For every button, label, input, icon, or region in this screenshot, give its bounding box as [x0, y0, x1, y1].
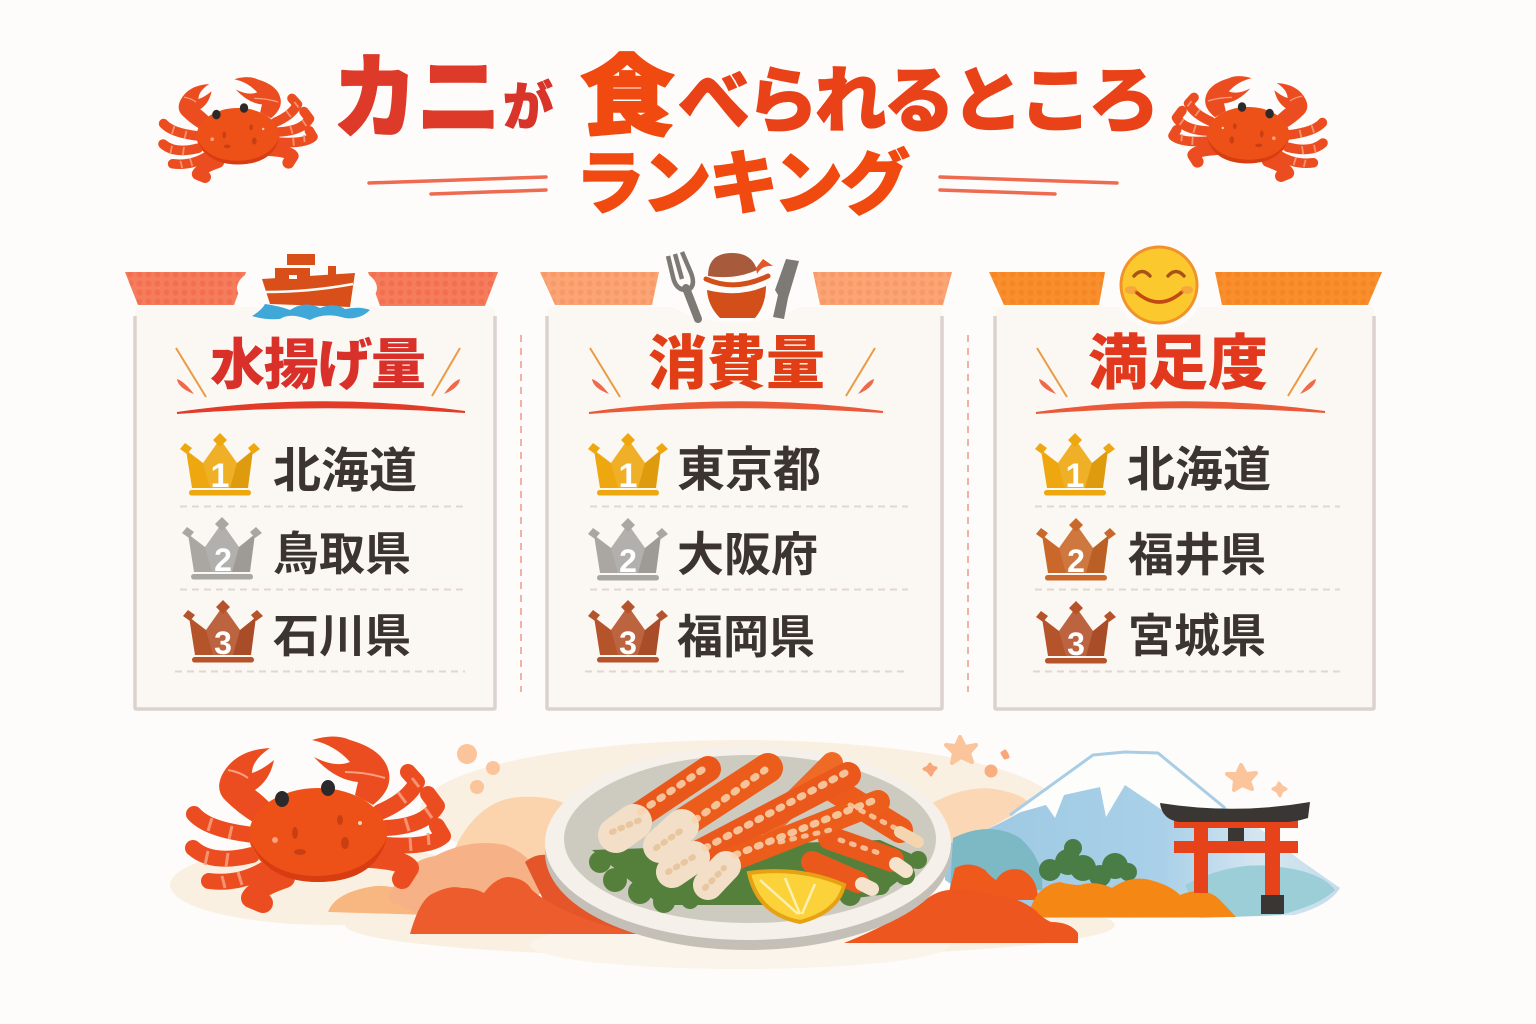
rank 2	[182, 517, 411, 580]
heading underline	[1036, 402, 1325, 413]
small crab legs	[770, 763, 918, 889]
rank 3	[183, 600, 411, 662]
ribbon	[125, 272, 498, 306]
rank 3: 福岡県	[677, 611, 815, 663]
orange bushes	[947, 864, 1038, 900]
icon: crab right	[1173, 76, 1323, 176]
panel: landing volume	[125, 254, 498, 710]
panel: consumption	[540, 250, 952, 710]
heading underline	[589, 402, 883, 413]
ranking rows	[1035, 433, 1271, 664]
title heading: カニ	[333, 48, 501, 150]
heading sparkles	[1037, 348, 1317, 397]
pine tree	[1039, 839, 1137, 887]
rank 3: 宮城県	[1128, 610, 1266, 662]
torii gate	[1160, 802, 1310, 914]
rank 3: 3	[619, 625, 637, 661]
peach hill right	[910, 788, 1030, 850]
orange bushes front	[1028, 879, 1236, 917]
plate of crab legs	[545, 746, 951, 950]
card	[135, 307, 495, 710]
rank 2	[1036, 518, 1266, 581]
title heading: が	[503, 78, 553, 137]
rank 1: 北海道	[273, 445, 417, 498]
rank 1	[1035, 433, 1271, 497]
icon: large crab	[193, 736, 443, 903]
rank 2: 2	[214, 542, 232, 578]
heading: 満足度	[1088, 330, 1268, 397]
panel: satisfaction	[989, 240, 1382, 710]
ribbon	[540, 272, 952, 305]
icon: crab left	[163, 77, 313, 177]
ribbon	[989, 272, 1382, 305]
rank 2: 鳥取県	[273, 528, 411, 580]
heading underline	[177, 402, 465, 413]
rank 2	[588, 518, 818, 581]
heading: 消費量	[648, 331, 825, 397]
icon: cutlery and bowl	[668, 252, 799, 319]
title heading	[333, 48, 1160, 223]
title heading: べられるところ	[678, 62, 1160, 142]
heading sparkles	[176, 348, 460, 397]
heading: 水揚げ量	[210, 334, 426, 396]
rank 1	[180, 433, 417, 498]
rank 2: 福井県	[1128, 529, 1266, 581]
title heading: ランキング	[575, 145, 910, 223]
title heading: 食	[580, 48, 675, 147]
rank 3: 3	[214, 625, 232, 661]
plate	[545, 756, 951, 950]
rank 2: 2	[619, 543, 637, 579]
card	[547, 307, 942, 710]
rank 1: 1	[211, 457, 229, 495]
cream wash background	[170, 740, 1115, 969]
icon: ship	[252, 254, 370, 320]
large crab legs	[612, 768, 895, 888]
icon: smiley	[1114, 240, 1204, 330]
rank 1	[588, 433, 821, 497]
lettuce	[589, 840, 927, 913]
heading sparkles	[590, 348, 875, 397]
ranking rows	[588, 433, 821, 663]
white notch behind ship	[237, 260, 377, 316]
rank 2: 2	[1067, 543, 1085, 579]
rank 1: 1	[619, 457, 637, 495]
rank 2: 大阪府	[677, 528, 818, 581]
white notch behind bowl	[658, 250, 814, 322]
rank 1: 北海道	[1127, 444, 1271, 497]
ranking rows	[180, 433, 417, 662]
rank 3: 3	[1067, 626, 1085, 662]
title flourish lines	[369, 177, 1117, 194]
peach and orange hills left	[328, 797, 650, 934]
card	[995, 307, 1374, 710]
rank 3: 石川県	[273, 610, 411, 662]
rank 1: 1	[1066, 457, 1084, 495]
stars	[924, 737, 1286, 796]
dots	[457, 744, 500, 794]
rank 3	[588, 600, 815, 663]
lower red bush	[844, 889, 1078, 943]
mount fuji	[945, 752, 1340, 918]
bottom illustration	[170, 736, 1340, 969]
rank 3	[1036, 601, 1266, 664]
lemon wedge	[749, 871, 844, 922]
rank 1: 東京都	[677, 444, 821, 497]
